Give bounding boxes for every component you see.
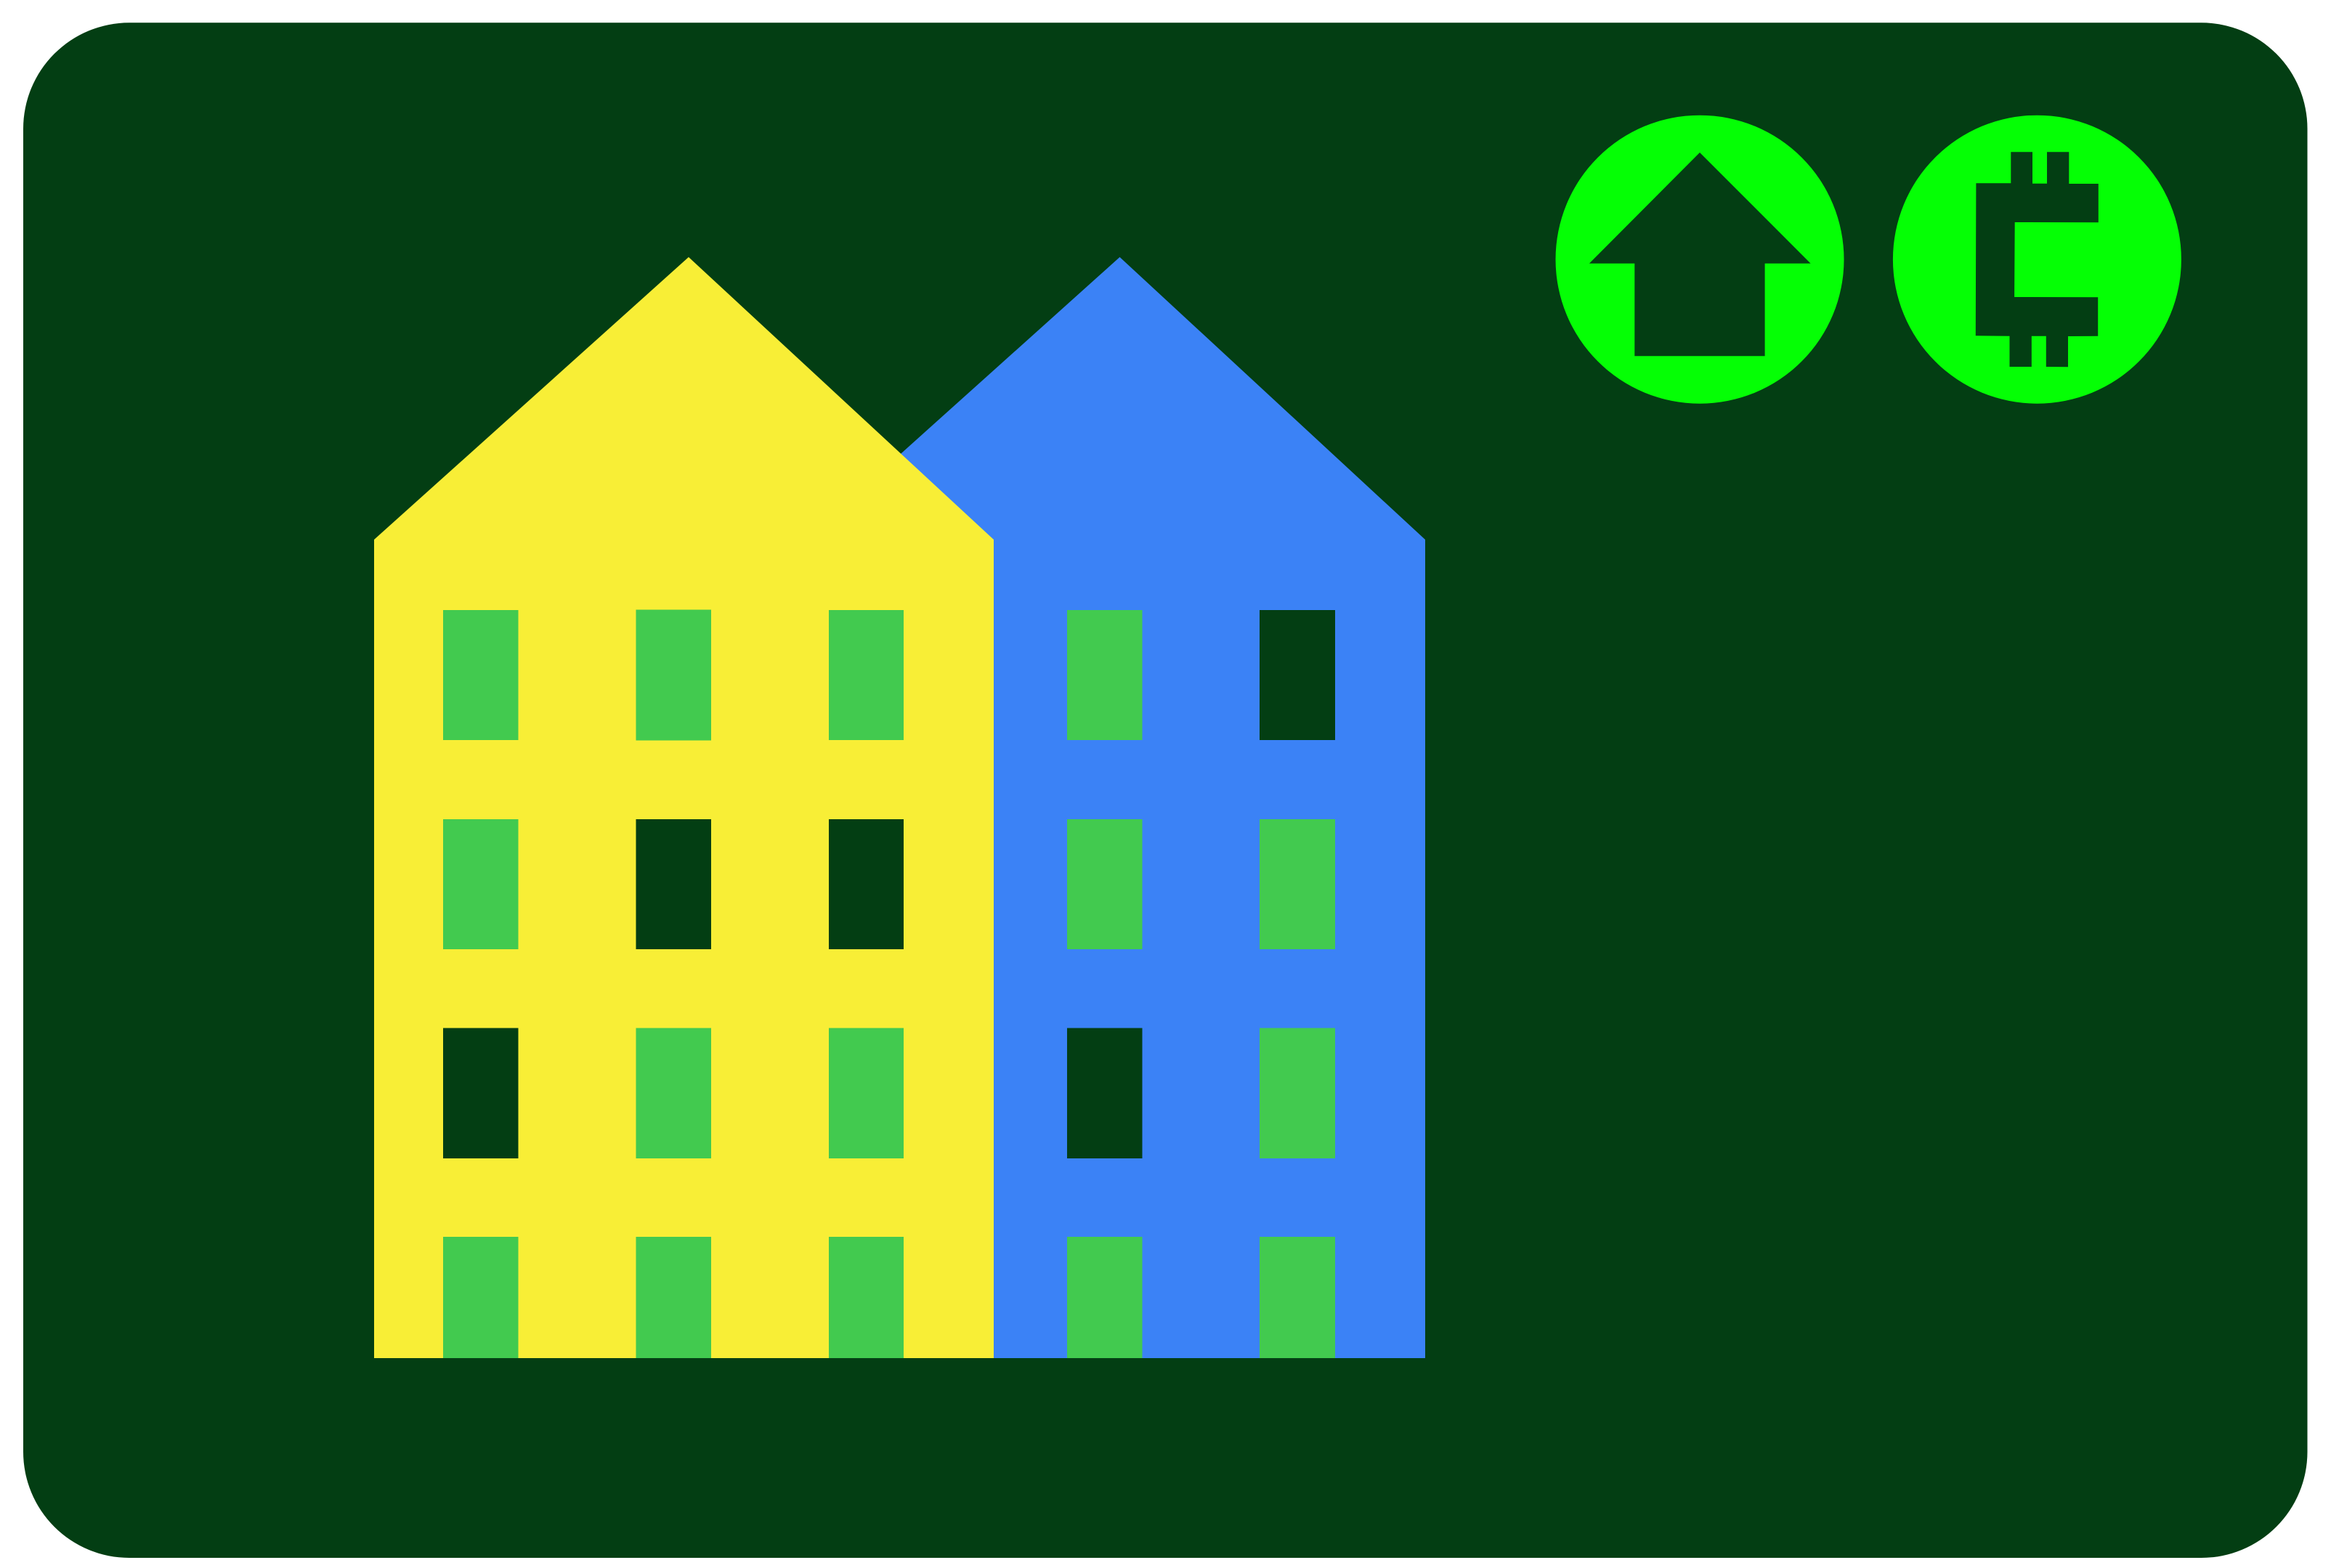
windows: yellow building bbox=[443, 610, 904, 1358]
icon: coin symbol in circle bbox=[1893, 115, 2181, 404]
building: blue house with windows bbox=[805, 257, 1425, 1358]
building: yellow house with windows bbox=[374, 257, 994, 1358]
windows: blue building bbox=[1067, 610, 1335, 1358]
icon: up arrow in circle bbox=[1556, 115, 1844, 404]
